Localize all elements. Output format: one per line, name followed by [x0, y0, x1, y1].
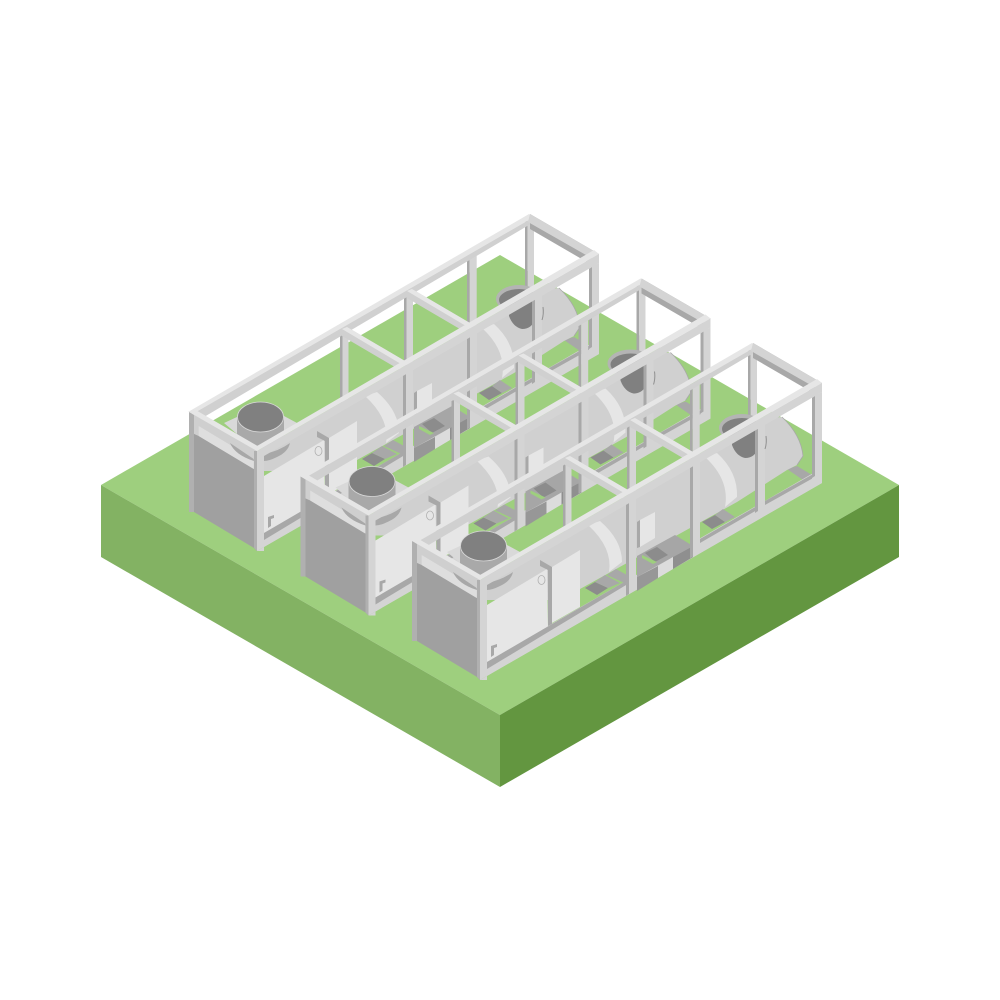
duct body: [487, 417, 803, 600]
duct access panel: [640, 512, 655, 547]
cabinet left face: [412, 541, 480, 680]
duct highlight bands: [588, 453, 737, 572]
back unit: [188, 214, 599, 551]
lower pads: [585, 509, 735, 595]
access panel shadow strip: [637, 520, 640, 548]
cabinet side panel: [552, 550, 580, 623]
outlet elbow: [719, 414, 765, 458]
roof deck and fan: [447, 531, 520, 580]
cabinet door: [487, 569, 548, 662]
door handle: [491, 644, 497, 657]
upper vent crescent: [487, 572, 513, 590]
bottom rail inner edge: [487, 473, 815, 669]
door lock: [538, 576, 545, 584]
front top rail: [412, 379, 822, 590]
cabinet divider post: [540, 560, 552, 626]
duct end edge: [782, 417, 803, 465]
front unit: [411, 343, 822, 680]
frame front post and bottom rail: [477, 468, 822, 680]
front uprights: [626, 392, 822, 596]
rear bottom rail: [787, 466, 812, 480]
cross beams: [565, 418, 693, 499]
fan top: [460, 531, 506, 561]
ground block: [101, 255, 899, 787]
rear frame: [411, 343, 822, 546]
middle unit: [300, 278, 710, 616]
vent crescents: [453, 572, 477, 590]
